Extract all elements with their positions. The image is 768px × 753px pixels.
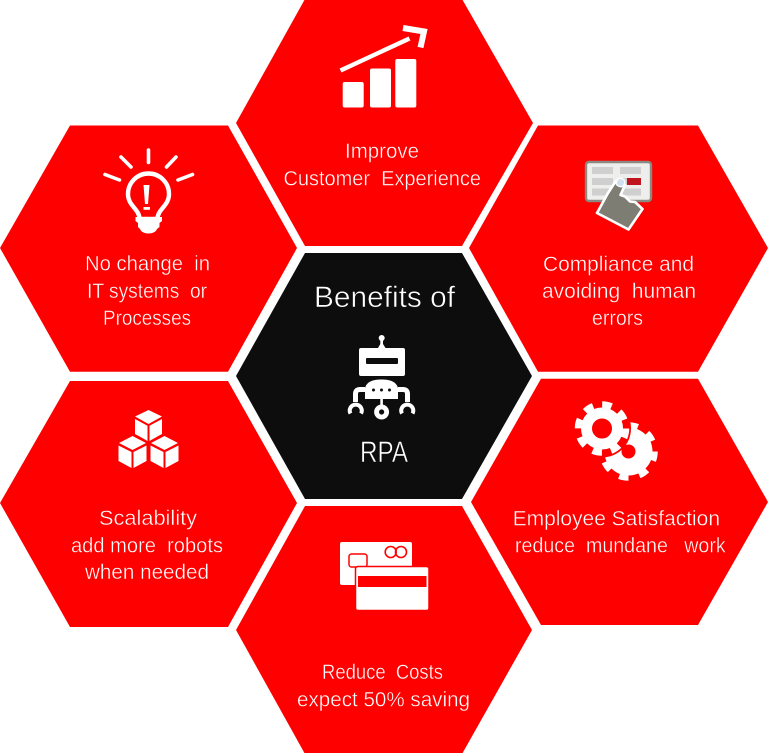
text: improve customer experience: Improve — [345, 139, 419, 163]
text: no change in IT systems or processes: Processes — [103, 306, 191, 330]
heading: benefits of: Benefits of — [314, 281, 456, 314]
icon: rising bar chart with arrow — [340, 28, 424, 108]
text: no change in IT systems or processes: No change in — [85, 252, 210, 276]
text: compliance and avoiding human errors: errors — [592, 306, 643, 330]
panel: no change in IT systems — [0, 126, 297, 372]
text: improve customer experience: Customer Experience — [284, 166, 481, 190]
text: scalability add more robots when needed: when needed — [84, 560, 209, 584]
text: reduce costs expect 50% saving: expect 50% saving — [297, 688, 470, 712]
icon: light bulb with exclamation mark — [105, 150, 192, 234]
icon: stacked cubes — [118, 410, 178, 468]
panel: scalability — [0, 381, 297, 627]
text: compliance and avoiding human errors: Compliance and — [543, 252, 694, 276]
text: reduce costs expect 50% saving — [297, 660, 470, 712]
text: employee satisfaction reduce mundane work — [513, 507, 726, 558]
text: scalability add more robots when needed: add more robots — [71, 533, 223, 557]
text: scalability add more robots when needed: Scalability — [99, 506, 197, 530]
panel: compliance and avoiding human errors — [469, 126, 768, 372]
text: compliance and avoiding human errors: avoiding human — [542, 279, 696, 303]
icon: credit cards — [340, 542, 429, 610]
icon: hand pressing a form on screen — [586, 162, 651, 230]
icon: robot — [350, 335, 413, 420]
panel: improve customer experience — [236, 0, 533, 246]
icon: two interlocking gears — [573, 400, 654, 478]
panel: center benefits of RPA — [236, 253, 532, 499]
heading: RPA: RPA — [360, 436, 408, 469]
panel: employee satisfaction — [471, 379, 768, 625]
text: scalability add more robots when needed — [71, 506, 223, 584]
text: reduce costs expect 50% saving: Reduce Costs — [322, 660, 443, 684]
text: no change in IT systems or processes — [85, 252, 210, 330]
text: improve customer experience — [284, 139, 481, 190]
text: employee satisfaction reduce mundane work: Employee Satisfaction — [513, 507, 720, 531]
text: no change in IT systems or processes: IT systems or — [87, 279, 207, 303]
panel: reduce costs — [236, 506, 532, 753]
text: employee satisfaction reduce mundane work: reduce mundane work — [515, 534, 726, 558]
text: compliance and avoiding human errors — [542, 252, 696, 330]
